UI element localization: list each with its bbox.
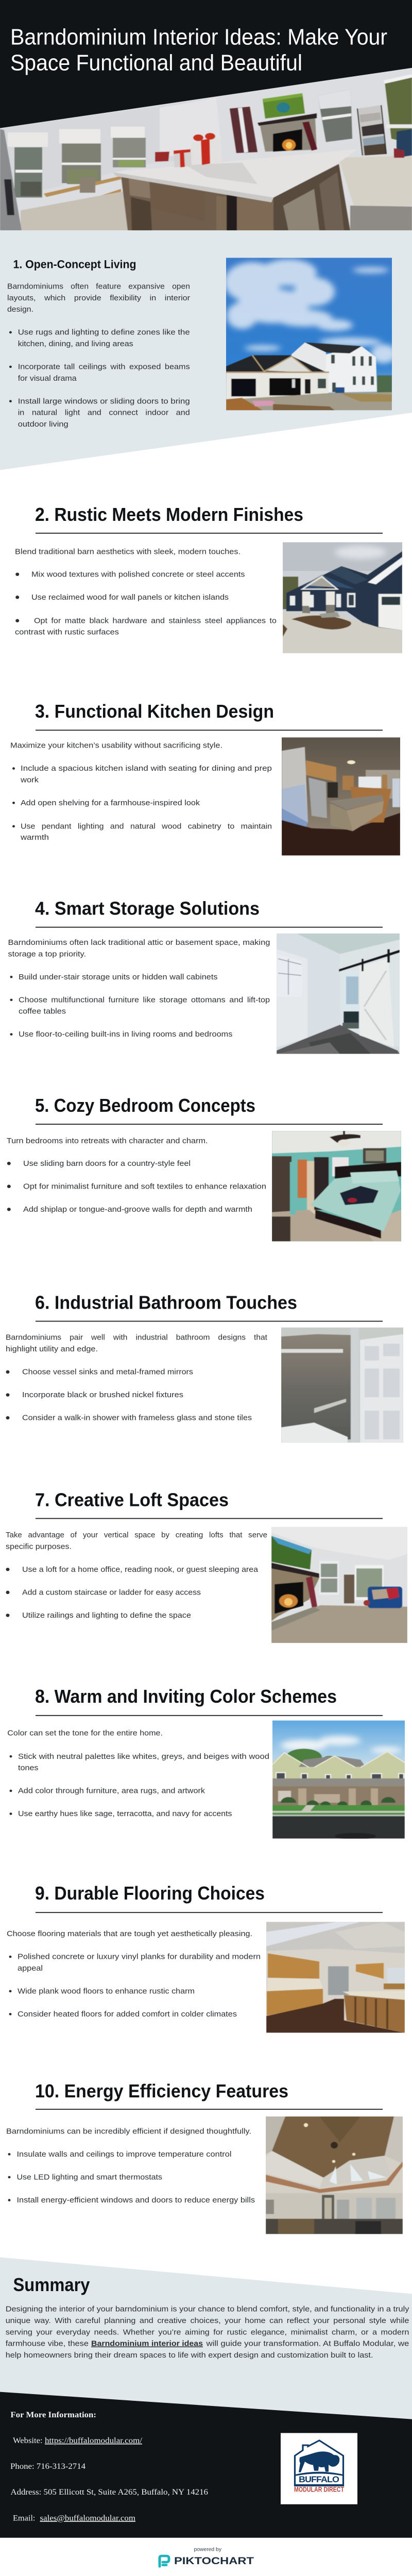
- heading: 8. Warm and Inviting Color Schemes: [35, 1686, 337, 1707]
- text block: Add open shelving for a farmhouse-inspired look: [21, 799, 200, 807]
- text block: Build under-stair storage units or hidden wall cabinets: [19, 973, 218, 981]
- text block: Consider heated floors for added comfort in colder climates: [18, 2010, 237, 2019]
- text block: open-concept copy: layouts, which provide flexibility in interior: [7, 294, 190, 302]
- text block: Barndominiums often lack traditional attic or basement space, making: [8, 939, 270, 947]
- panel: open-concept living: [0, 230, 412, 470]
- text block: work: [20, 776, 39, 784]
- section 6: industrial bathroom touches: [6, 1292, 403, 1443]
- section 2: rustic meets modern finishes: [15, 504, 402, 653]
- section 4: smart storage solutions: [8, 898, 400, 1054]
- heading: 3. Functional Kitchen Design: [35, 701, 274, 722]
- photo: barn door hallway: [277, 934, 400, 1054]
- header background: [0, 0, 412, 128]
- section 7: creative loft spaces: [6, 1489, 407, 1643]
- text block: open-concept copy: for visual drama: [18, 374, 77, 383]
- icon: piktochart mark: [160, 2556, 169, 2566]
- text block: open-concept copy: design.: [7, 306, 33, 314]
- heading: open-concept living: 1. Open-Concept Living: [13, 258, 136, 271]
- heading: 2. Rustic Meets Modern Finishes: [35, 504, 303, 524]
- text block: summary paragraph: serving your everyday needs. Whether you’re aiming for rustic elegance, minimalist charm, or a modern: [6, 2328, 409, 2336]
- text block: [7, 1137, 266, 1214]
- heading: 7. Creative Loft Spaces: [35, 1489, 229, 1510]
- text block: Choose vessel sinks and metal-framed mirrors: [22, 1368, 193, 1376]
- text block: Utilize railings and lighting to define the space: [22, 1611, 191, 1620]
- text block: appeal: [18, 1964, 43, 1973]
- left bay windows: [14, 147, 42, 197]
- text block: summary paragraph: [6, 2305, 409, 2360]
- text block: Install energy-efficient windows and doors to reduce energy bills: [16, 2196, 255, 2205]
- photo: living room with fireplace and blue chair: [271, 1527, 407, 1643]
- text block: Opt for matte black hardware and stainless steel appliances to: [34, 617, 277, 625]
- shelf: [357, 105, 386, 156]
- text block: [10, 741, 272, 842]
- text block: tones: [18, 1764, 39, 1772]
- contact details: Address: 505 Ellicott St, Suite A265, Buffalo, NY 14216: [10, 2487, 208, 2497]
- text block: Choose flooring materials that are tough yet aesthetically pleasing.: [7, 1930, 252, 1938]
- heading: summary: Summary: [13, 2274, 90, 2295]
- heading: 9. Durable Flooring Choices: [35, 1883, 265, 1904]
- section 8: warm and inviting color schemes: [7, 1686, 405, 1840]
- text block: Barndominiums can be incredibly efficient if designed thoughtfully.: [6, 2127, 251, 2136]
- logo: buffalo modular direct: BUFFALO: [299, 2475, 339, 2484]
- text block: Take advantage of your vertical space by creating lofts that serve: [6, 1531, 267, 1539]
- text block: open-concept copy: [7, 282, 190, 429]
- text block: [6, 1531, 267, 1620]
- text block: storage a top priority.: [8, 950, 86, 958]
- section 3: functional kitchen design: [10, 701, 400, 855]
- photo: vaulted wood ceiling room: [266, 2116, 403, 2234]
- text block: Use earthy hues like sage, terracotta, and navy for accents: [18, 1810, 232, 1818]
- photo: townhouses: [272, 1721, 405, 1839]
- text block: contrast with rustic surfaces: [15, 628, 119, 637]
- heading: 6. Industrial Bathroom Touches: [35, 1292, 297, 1313]
- text block: Maximize your kitchen’s usability without sacrificing style.: [10, 741, 222, 750]
- text block: coffee tables: [19, 1007, 66, 1016]
- text block: open-concept copy: Incorporate tall ceilings with exposed beams: [18, 363, 190, 371]
- text block: Add a custom staircase or ladder for easy access: [22, 1588, 201, 1597]
- text block: Use pendant lighting and natural wood cabinetry to maintain: [21, 822, 272, 831]
- text block: open-concept copy: kitchen, dining, and living areas: [18, 340, 133, 348]
- heading: 5. Cozy Bedroom Concepts: [35, 1095, 255, 1116]
- section 5: cozy bedroom concepts: [7, 1095, 401, 1242]
- text block: Use floor-to-ceiling built-ins in living rooms and bedrooms: [19, 1030, 233, 1039]
- footer: powered by piktochart: powered by: [194, 2547, 222, 2552]
- text block: Use LED lighting and smart thermostats: [16, 2173, 162, 2181]
- text block: warmth: [20, 833, 49, 842]
- panel: footer contact: [0, 2392, 412, 2538]
- title: [10, 24, 387, 75]
- text block: open-concept copy: Install large windows or sliding doors to bring: [18, 397, 190, 405]
- TV: [263, 93, 305, 118]
- contact details: Phone: 716-313-2714: [10, 2462, 85, 2471]
- text block: Polished concrete or luxury vinyl planks for durability and modern: [18, 1953, 261, 1961]
- footer: powered by piktochart: [160, 2547, 254, 2567]
- contact details: Website:: [13, 2436, 43, 2445]
- text block: Use sliding barn doors for a country-style feel: [23, 1159, 191, 1168]
- contact details: https://buffalomodular.com/: [45, 2436, 142, 2445]
- photo: navy house with concrete drive: [283, 542, 402, 653]
- text block: [7, 1930, 261, 2019]
- left floor: [21, 191, 134, 230]
- photo: new house under blue sky: [226, 258, 392, 410]
- text block: specific purposes.: [6, 1543, 72, 1551]
- text block: Consider a walk-in shower with frameless glass and stone tiles: [22, 1414, 252, 1422]
- contact details: [10, 2410, 208, 2522]
- text block: Color can set the tone for the entire home.: [7, 1729, 163, 1738]
- photo: teal bedroom with ceiling fan: [272, 1131, 401, 1242]
- text block: Use a loft for a home office, reading nook, or guest sleeping area: [22, 1565, 258, 1574]
- text block: Stick with neutral palettes like whites, greys, and beiges with wood: [18, 1752, 269, 1761]
- text block: Barndominiums pair well with industrial bathroom designs that: [6, 1333, 268, 1342]
- contact details: sales@buffalomodular.com: [40, 2513, 135, 2522]
- text block: [6, 1333, 268, 1422]
- text block: Insulate walls and ceilings to improve temperature control: [16, 2150, 232, 2159]
- text block: summary paragraph: will guide your transformation. At Buffalo Modular, we: [205, 2340, 409, 2348]
- curtains: [230, 107, 258, 153]
- fridge: [0, 129, 22, 230]
- text block: summary paragraph: unique way. With careful planning and creative choices, your home can reflect your personal style while: [6, 2316, 409, 2325]
- text block: Turn bedrooms into retreats with character and charm.: [7, 1137, 208, 1145]
- text block: [15, 548, 277, 637]
- text block: [6, 2127, 255, 2205]
- text block: Add shiplap or tongue-and-groove walls for depth and warmth: [23, 1205, 252, 1214]
- contact details: For More Information:: [10, 2410, 96, 2419]
- footer: powered by piktochart: PIKTOCHART: [174, 2555, 254, 2567]
- logo: buffalo modular direct: [281, 2433, 357, 2504]
- contact details: Email:: [13, 2513, 35, 2522]
- bison: [299, 2451, 339, 2472]
- fireplace: [260, 118, 317, 151]
- photo: kitchen with wood cabinets: [282, 737, 400, 855]
- text block: [7, 1729, 269, 1818]
- text block: summary paragraph: farmhouse vibe, these: [6, 2340, 89, 2348]
- text block: open-concept copy: Use rugs and lighting to define zones like the: [18, 328, 190, 337]
- text block: Mix wood textures with polished concrete or steel accents: [31, 570, 245, 579]
- title: Space Functional and Beautiful: [10, 50, 302, 75]
- photo: glass shower and door: [281, 1327, 403, 1443]
- gifts: [192, 149, 216, 164]
- text block: highlight utility and edge.: [6, 1345, 98, 1353]
- countertop: [116, 157, 346, 202]
- text block: Wide plank wood floors to enhance rustic charm: [18, 1987, 195, 1995]
- text block: open-concept copy: Barndominiums often feature expansive open: [7, 282, 190, 291]
- text block: summary paragraph: Designing the interior of your barndominium is your chance to blend comfort, style, and functionality in a truly: [6, 2305, 409, 2314]
- text block: summary paragraph: Barndominium interior ideas: [91, 2340, 203, 2348]
- text block: [8, 939, 270, 1039]
- right windows: [318, 100, 353, 142]
- bench: [44, 176, 121, 197]
- text block: Add color through furniture, area rugs, and artwork: [18, 1787, 205, 1795]
- photo: kitchen with hickory cabinets: [266, 1922, 405, 2033]
- text block: Blend traditional barn aesthetics with sleek, modern touches.: [15, 548, 241, 556]
- carpet and floor: [340, 155, 412, 207]
- red pillow: [155, 151, 169, 162]
- heading: 10. Energy Efficiency Features: [35, 2080, 288, 2102]
- section 10: energy efficiency features: [6, 2080, 403, 2234]
- heading: 4. Smart Storage Solutions: [35, 898, 260, 919]
- hero photo: kitchen island and living room: [0, 67, 412, 230]
- logo: buffalo modular direct: MODULAR DIRECT: [294, 2486, 344, 2494]
- text block: Opt for minimalist furniture and soft textiles to enhance relaxation: [23, 1182, 266, 1191]
- text block: Use reclaimed wood for wall panels or kitchen islands: [31, 593, 229, 602]
- text block: Choose multifunctional furniture like storage ottomans and lift-top: [19, 996, 270, 1004]
- text block: open-concept copy: in natural light and connect indoor and: [18, 409, 190, 417]
- text block: Include a spacious kitchen island with seating for dining and prep: [21, 765, 272, 773]
- text block: summary paragraph: help homeowners bring their dream spaces to life with expert design and customization built to last.: [6, 2351, 373, 2360]
- text block: open-concept copy: outdoor living: [18, 420, 68, 429]
- section 9: durable flooring choices: [7, 1883, 405, 2033]
- panel: summary: [0, 2257, 412, 2419]
- text block: Incorporate black or brushed nickel fixtures: [22, 1391, 183, 1399]
- island body: [121, 176, 273, 230]
